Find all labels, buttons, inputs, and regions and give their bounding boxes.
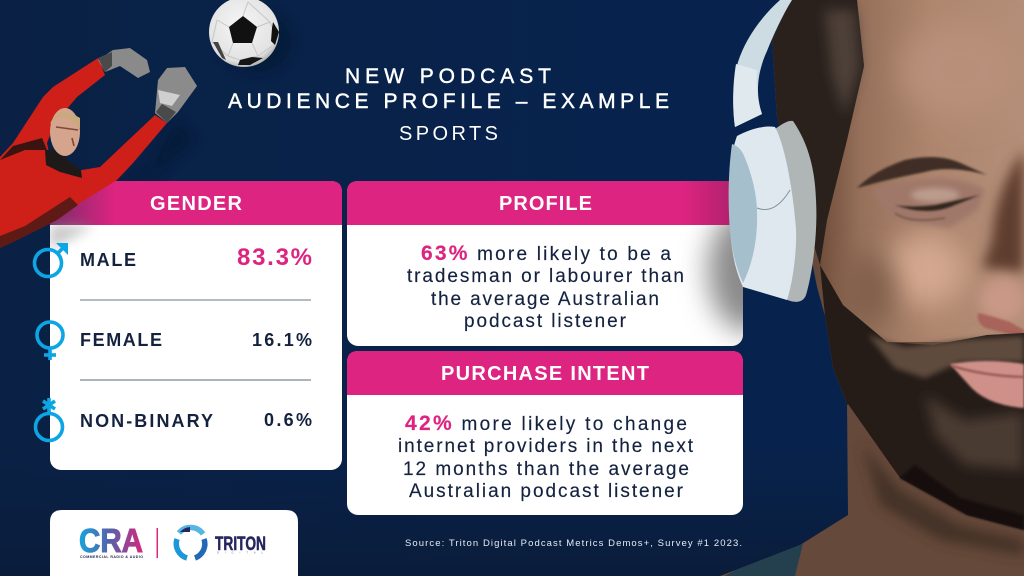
goalkeeper shadow — [110, 120, 195, 190]
logo: CRA: COMMERCIAL RADIO & AUDIO — [80, 555, 143, 559]
logo: CRA: CRA — [79, 522, 143, 559]
male row — [80, 244, 312, 271]
logo: Triton: TRITON — [215, 534, 266, 555]
title: SPORTS — [399, 123, 498, 145]
purchase intent header — [347, 351, 743, 395]
headphones cushion — [775, 121, 816, 302]
purchase intent text: 42% more likely to change — [405, 412, 687, 435]
purchase intent header: PURCHASE INTENT — [441, 363, 649, 385]
gender header: GENDER — [150, 193, 243, 215]
profile text: 63% more likely to be a — [421, 242, 671, 265]
profile header: PROFILE — [499, 193, 592, 215]
headphones disc — [729, 144, 757, 283]
profile text: the average Australian — [431, 289, 659, 310]
profile header — [347, 181, 743, 225]
goalkeeper gloves — [98, 48, 150, 78]
purchase intent text: 12 months than the average — [403, 459, 689, 480]
title — [228, 65, 669, 145]
non-binary row: NON-BINARY — [80, 411, 213, 431]
logo: Triton — [176, 527, 266, 558]
title: NEW PODCAST — [345, 65, 551, 88]
lips — [950, 361, 1024, 408]
headphones cup — [729, 126, 796, 300]
purchase intent text: internet providers in the next — [398, 436, 694, 457]
headphones band — [733, 0, 792, 127]
face skin — [820, 0, 1024, 353]
photo: man wearing headphones — [720, 0, 1024, 576]
eyebrow — [857, 157, 987, 188]
goalkeeper head — [50, 108, 80, 156]
eyelid — [872, 178, 985, 228]
goalkeeper — [0, 48, 197, 248]
profile text: tradesman or labourer than — [407, 266, 684, 287]
source note: Source: Triton Digital Podcast Metrics Demos+, Survey #1 2023. — [405, 538, 742, 549]
title: AUDIENCE PROFILE – EXAMPLE — [228, 90, 669, 113]
profile text: podcast listener — [464, 311, 627, 332]
female row — [80, 330, 312, 350]
non-binary row — [80, 410, 312, 431]
icon: non-binary symbol — [36, 398, 62, 440]
non-binary row: 0.6% — [264, 410, 312, 430]
football — [209, 0, 292, 72]
beard — [820, 265, 1024, 530]
goalkeeper jersey — [0, 58, 167, 248]
gender header — [50, 181, 342, 225]
panel: purchase intent — [347, 351, 743, 515]
female row: 16.1% — [252, 330, 312, 350]
female row: FEMALE — [80, 330, 162, 350]
icon: female symbol — [37, 322, 63, 360]
male row: MALE — [80, 250, 136, 270]
icon: male symbol — [34, 243, 68, 276]
hair — [772, 0, 864, 265]
neck — [848, 404, 1024, 530]
panel: gender — [50, 181, 342, 470]
profile text — [407, 242, 684, 332]
logo: Triton: DIGITAL — [217, 552, 264, 554]
male row: 83.3% — [237, 244, 312, 271]
purchase intent text — [398, 412, 694, 502]
purchase intent text: Australian podcast listener — [409, 481, 684, 502]
panel: profile — [347, 181, 743, 346]
panel: logos — [50, 510, 298, 576]
shirt — [725, 544, 803, 576]
